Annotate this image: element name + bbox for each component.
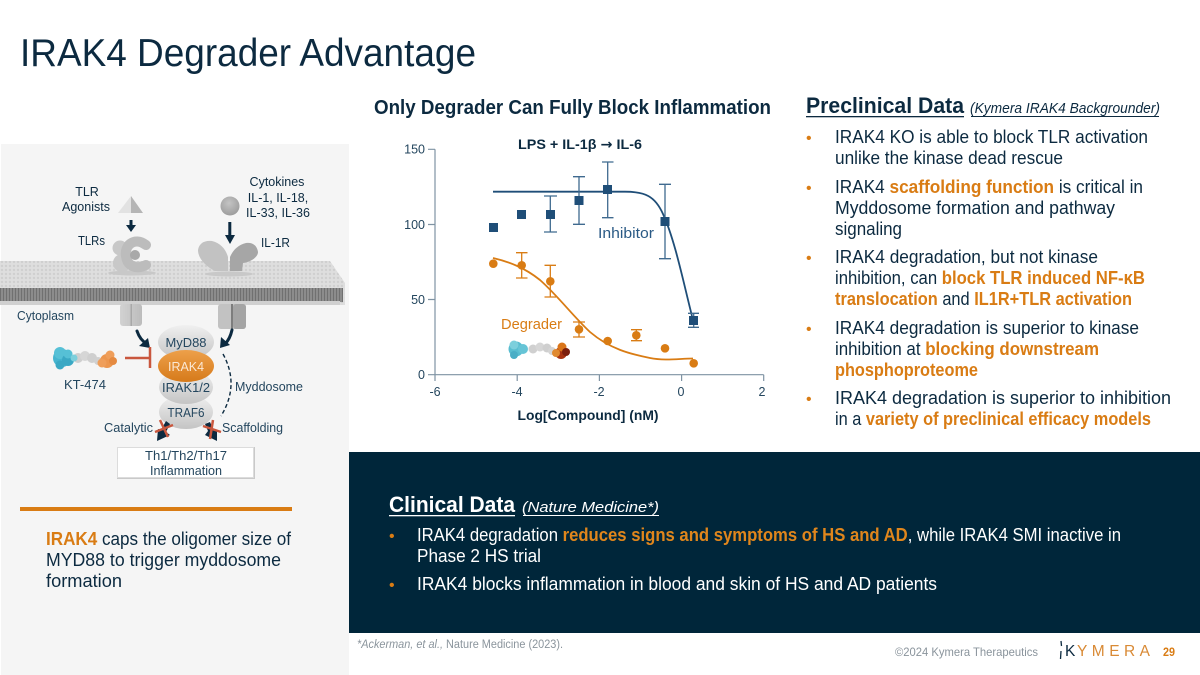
arrow: cytokine to IL-1R <box>225 222 235 244</box>
label: Scaffolding: Scaffolding <box>222 421 283 435</box>
icon: KT-474 molecule <box>53 347 117 370</box>
label: Myddosome: Myddosome <box>235 380 303 394</box>
arrow: TLR agonist to TLR <box>126 220 136 232</box>
bullet list: Myddosome formation and pathway <box>835 198 1115 218</box>
heading: preclinical data: Preclinical Data <box>806 93 964 118</box>
summary text: MYD88 to trigger myddosome <box>46 550 281 570</box>
label: IL-1R: IL-1R <box>261 236 290 250</box>
logo: Kymera: K <box>1065 643 1076 660</box>
bullet list: IRAK4 scaffolding function is critical in <box>835 177 1143 197</box>
icon: TLR agonist pyramid <box>118 196 143 213</box>
panel: preclinical data <box>806 93 1171 429</box>
bullet list: • <box>806 321 812 338</box>
label: TLR Agonists: TLR <box>75 185 99 199</box>
summary text: IRAK4 caps the oligomer size of <box>46 529 292 549</box>
membrane <box>0 261 345 305</box>
bullet list: IRAK4 KO is able to block TLR activation <box>835 127 1148 147</box>
label: TLR Agonists: Agonists <box>62 200 110 214</box>
bullet list: IRAK4 degradation is superior to inhibition <box>835 388 1171 408</box>
axis tick labels: 100 <box>404 218 425 232</box>
title: IRAK4 Degrader Advantage <box>20 32 476 75</box>
arrows: receptors to MyD88 <box>137 330 232 348</box>
orange divider <box>20 507 292 511</box>
label: Cytokines: Cytokines <box>250 175 304 189</box>
axis tick labels: 0 <box>678 385 685 399</box>
summary text: formation <box>46 571 122 591</box>
heading: clinical data <box>389 492 659 517</box>
axis tick labels: 0 <box>418 368 425 382</box>
summary text <box>46 529 292 591</box>
label: Cytokines: IL-1, IL-18, <box>248 191 308 205</box>
page number: 29 <box>1163 647 1175 659</box>
heading: clinical data: (Nature Medicine*) <box>522 499 659 516</box>
label: Catalytic: Catalytic <box>104 421 153 435</box>
box: Th1/Th2/Th17 inflammation: Th1/Th2/Th17 <box>145 449 227 463</box>
icon: TLR receptor <box>112 240 146 326</box>
icon: IL-1R receptor <box>198 241 258 329</box>
axis tick labels: -2 <box>593 385 605 399</box>
box: Th1/Th2/Th17 inflammation: Inflammation <box>150 464 222 478</box>
axes <box>428 149 764 381</box>
icon: cytokine sphere <box>220 196 240 216</box>
axis tick labels: 50 <box>411 293 425 307</box>
axis tick labels: -4 <box>511 385 523 399</box>
bullet list: • <box>806 250 812 267</box>
label: Cytoplasm: Cytoplasm <box>17 309 74 323</box>
label: Degrader: Degrader <box>501 316 562 333</box>
bullet list <box>806 127 1171 429</box>
myddosome stack: TRAF6 <box>168 405 204 420</box>
bullet list: inhibition, can block TLR induced NF-κB <box>835 268 1145 288</box>
blocked arrows <box>155 420 221 441</box>
inhibition bar <box>125 347 150 368</box>
panel: pathway diagram and summary <box>0 144 349 675</box>
series: inhibitor <box>489 162 699 327</box>
bullet list: • <box>806 130 812 147</box>
bullet list: translocation and IL1R+TLR activation <box>835 289 1132 309</box>
chart title: LPS + IL-1β → IL-6 <box>518 136 642 153</box>
clinical bullet list <box>389 525 1121 594</box>
clinical bullet list: IRAK4 blocks inflammation in blood and skin of HS and AD patients <box>417 574 937 594</box>
bullet list: inhibition at blocking downstream <box>835 339 1099 359</box>
axis title: Log[Compound] (nM) <box>518 407 658 423</box>
series: degrader <box>489 253 698 368</box>
bullet list: IRAK4 degradation, but not kinase <box>835 247 1098 267</box>
myddosome stack: MyD88 <box>166 335 206 350</box>
box: Th1/Th2/Th17 inflammation <box>117 447 255 479</box>
logo: Kymera: YMERA <box>1077 643 1151 660</box>
myddosome bracket <box>221 354 231 416</box>
axis tick labels: 150 <box>404 142 425 156</box>
clinical bullet list: • <box>389 528 395 545</box>
heading: clinical data: Clinical Data <box>389 492 515 517</box>
bullet list: signaling <box>835 219 902 239</box>
copyright: ©2024 Kymera Therapeutics <box>895 645 1038 659</box>
myddosome stack: IRAK4 <box>168 359 204 374</box>
bullet list: • <box>806 180 812 197</box>
label: TLRs: TLRs <box>78 234 105 248</box>
footnote: *Ackerman, et al., Nature Medicine (2023). <box>357 639 563 651</box>
bullet list: phosphoproteome <box>835 360 978 380</box>
bullet list: in a variety of preclinical efficacy models <box>835 409 1151 429</box>
myddosome stack: IRAK1/2 <box>162 380 210 395</box>
panel: clinical data <box>349 452 1200 633</box>
bullet list: unlike the kinase dead rescue <box>835 148 1063 168</box>
label: Cytokines: IL-33, IL-36 <box>246 206 310 220</box>
axis tick labels: -6 <box>429 385 441 399</box>
chart: dose response <box>404 136 766 423</box>
clinical bullet list: • <box>389 577 395 594</box>
axis tick labels: 2 <box>759 385 766 399</box>
chart heading: Only Degrader Can Fully Block Inflammation <box>374 97 771 119</box>
label: KT-474: KT-474 <box>64 378 106 392</box>
heading: preclinical data <box>806 93 1160 118</box>
myddosome stack <box>158 325 214 429</box>
clinical bullet list: IRAK4 degradation reduces signs and symptoms of HS and AD, while IRAK4 SMI inactive in <box>417 525 1121 545</box>
clinical bullet list: Phase 2 HS trial <box>417 546 541 566</box>
label: Inhibitor: Inhibitor <box>598 225 654 242</box>
heading: preclinical data: (Kymera IRAK4 Backgrounder) <box>970 101 1160 117</box>
bullet list: • <box>806 391 812 408</box>
bullet list: IRAK4 degradation is superior to kinase <box>835 318 1139 338</box>
icon: degrader molecule <box>508 340 570 359</box>
axis tick labels <box>404 142 766 399</box>
